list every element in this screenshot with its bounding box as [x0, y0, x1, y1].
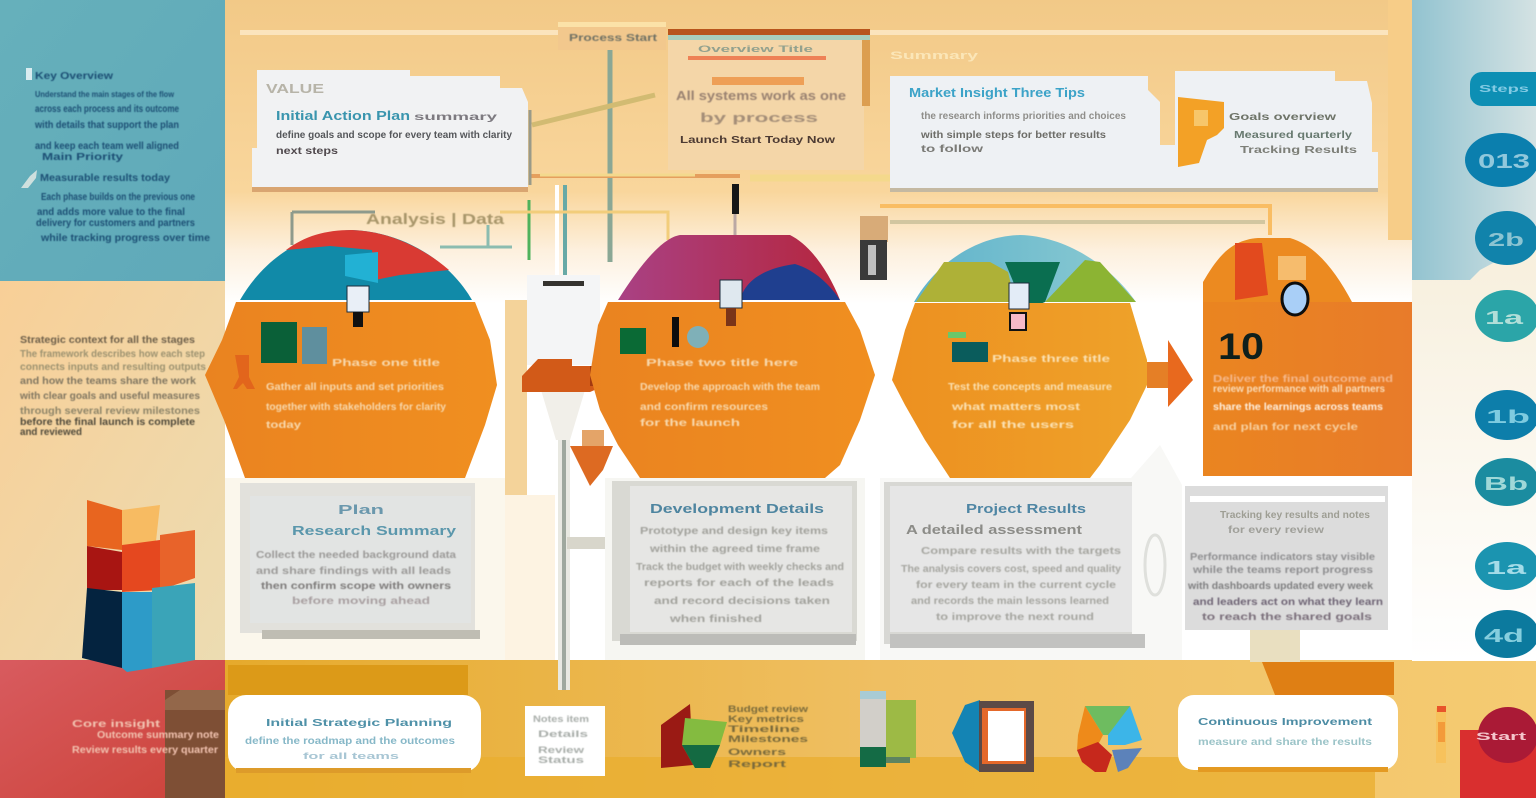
- badge 5: Bb: [1484, 474, 1528, 494]
- panel: right column: [1412, 0, 1536, 661]
- card 1: Plan: [338, 502, 384, 517]
- stage 1: [205, 230, 497, 478]
- card 4: while the teams report progress: [1192, 565, 1374, 576]
- document note: Details: [538, 729, 588, 739]
- card 3: The analysis covers cost, speed and quality: [901, 564, 1121, 575]
- panel: left middle beige: and how the teams share the work: [20, 376, 196, 387]
- hexagon 3: [892, 303, 1147, 478]
- icon: pin 4: [1282, 283, 1308, 315]
- pill 1: for all teams: [303, 751, 399, 761]
- dome 4: [1203, 238, 1352, 302]
- badge 1: [1465, 133, 1536, 187]
- icon: binder: [860, 691, 916, 767]
- panel: top left teal: Key Overview: [35, 71, 113, 82]
- center top callout: Launch Start Today Now: [680, 135, 835, 146]
- text 2: and confirm resources: [640, 402, 769, 413]
- badge 1: 013: [1478, 151, 1530, 173]
- pill 1: [228, 695, 481, 773]
- center top callout: by process: [700, 110, 818, 125]
- badge column: [1465, 133, 1536, 658]
- icon: pin 1: [347, 286, 369, 327]
- card 1: before moving ahead: [292, 596, 430, 607]
- card 4: to reach the shared goals: [1202, 612, 1373, 623]
- pill 2: measure and share the results: [1198, 737, 1373, 748]
- text 3: Test the concepts and measure: [948, 382, 1112, 393]
- icon: black bar and dial: [672, 317, 709, 348]
- dome 1: [240, 230, 472, 300]
- panel: top left teal: Understand the main stages of the flow: [35, 90, 175, 99]
- card 1: and share findings with all leads: [256, 566, 452, 577]
- card 1: then confirm scope with owners: [261, 581, 452, 592]
- card 2: within the agreed time frame: [649, 544, 821, 555]
- white header card right: with simple steps for better results: [920, 130, 1106, 141]
- card 1: Collect the needed background data: [256, 550, 456, 561]
- card 3: A detailed assessment: [906, 522, 1083, 537]
- text 4: share the learnings across teams: [1213, 402, 1383, 413]
- icon: orange pennant: [1178, 97, 1224, 167]
- legend lines: Timeline: [728, 724, 800, 734]
- text 1: Phase one title: [332, 358, 441, 369]
- document note: [525, 706, 605, 776]
- icon: lamp: [860, 216, 888, 280]
- text 4: review performance with all partners: [1213, 384, 1385, 395]
- badge 4: 1b: [1486, 407, 1530, 427]
- panel: top left teal: [0, 0, 225, 281]
- panel: top left teal: with details that support the plan: [34, 120, 179, 131]
- card 3: for every team in the current cycle: [916, 580, 1117, 591]
- panel: left middle beige: before the final launch is complete: [20, 417, 195, 428]
- white header card left: define goals and scope for every team with clarity: [276, 130, 512, 141]
- document note: Status: [538, 755, 584, 765]
- badge 5: [1475, 458, 1536, 506]
- text 2: Develop the approach with the team: [640, 382, 820, 393]
- arrow: down orange: [570, 430, 613, 486]
- badge 3: 1a: [1485, 308, 1525, 328]
- text 3: Phase three title: [992, 354, 1111, 365]
- card 4: Performance indicators stay visible: [1190, 552, 1375, 563]
- panel: top left teal: Measurable results today: [40, 173, 170, 184]
- panel: left middle beige: with clear goals and useful measures: [19, 391, 200, 402]
- panel: left middle beige: [0, 281, 225, 660]
- mid heading over connectors: Analysis | Data: [366, 211, 505, 228]
- icon: red book with green funnel: [661, 704, 727, 768]
- icon: isometric stacked box: [82, 500, 195, 672]
- text 4: and plan for next cycle: [1213, 422, 1359, 433]
- text 3: [948, 354, 1112, 431]
- white header card right: [890, 71, 1378, 192]
- exclamation mark: [1436, 706, 1446, 763]
- card 1: [225, 478, 505, 660]
- text 4: Deliver the final outcome and: [1213, 374, 1393, 385]
- white header card left: VALUE: [266, 81, 324, 96]
- badge: red corner: [1460, 707, 1536, 798]
- pill 2: Continuous Improvement: [1198, 717, 1373, 728]
- stage 2: [590, 184, 875, 478]
- dome 2: [618, 235, 840, 300]
- small note top right: Summary: [890, 50, 980, 62]
- pill 1: Initial Strategic Planning: [266, 718, 452, 729]
- card 4: with dashboards updated every week: [1187, 581, 1373, 592]
- white header card left: Initial Action Plan: [276, 108, 410, 123]
- icon: pin 2: [720, 280, 742, 326]
- card 4: for every review: [1228, 525, 1324, 536]
- text 1: Gather all inputs and set priorities: [266, 382, 444, 393]
- icon: green box: [261, 322, 297, 363]
- white header card right: the research informs priorities and choices: [921, 111, 1126, 122]
- panel: top left teal: Main Priority: [42, 152, 124, 163]
- page background: [225, 0, 1412, 660]
- pill 1: define the roadmap and the outcomes: [245, 736, 455, 747]
- right nav pill: Steps: [1479, 84, 1530, 95]
- icon: teal tile: [948, 332, 988, 362]
- white header card left: [252, 70, 528, 192]
- card 2: Track the budget with weekly checks and: [636, 562, 844, 573]
- text 3: what matters most: [951, 402, 1081, 413]
- right nav pill: [1470, 72, 1536, 106]
- arrow: right orange: [1147, 340, 1193, 407]
- card 2: when finished: [669, 614, 762, 625]
- card 2: [605, 478, 865, 660]
- card 3: Compare results with the targets: [921, 546, 1122, 557]
- badge 6: 1a: [1486, 558, 1528, 578]
- hexagon 1: [205, 302, 497, 478]
- tab label top center: [558, 22, 666, 50]
- icon: grey gear: [302, 327, 327, 364]
- icon: pole: [732, 184, 739, 214]
- badge 7: [1475, 610, 1536, 658]
- legend lines: Milestones: [728, 734, 808, 744]
- card 3: [880, 445, 1182, 660]
- icon: orange bowl: [522, 359, 604, 392]
- text 1: [266, 358, 446, 431]
- icon: figure: [233, 355, 255, 389]
- badge 3: [1475, 290, 1536, 342]
- stage 4: [1203, 238, 1412, 476]
- dome 3: [914, 235, 1136, 310]
- white header card right: Measured quarterly: [1234, 130, 1353, 141]
- panel: left middle beige: connects inputs and resulting outputs: [20, 362, 206, 373]
- badge 4: [1475, 390, 1536, 440]
- card 2: reports for each of the leads: [644, 578, 835, 589]
- panel: top left teal: and keep each team well aligned: [35, 141, 179, 152]
- white header card right: Market Insight Three Tips: [909, 85, 1085, 100]
- white header card left: next steps: [276, 146, 339, 157]
- stage 3: [860, 216, 1147, 478]
- panel: bottom left red: Review results every quarter: [72, 745, 218, 756]
- card 4: Tracking key results and notes: [1220, 510, 1370, 521]
- white header card right: Tracking Results: [1240, 145, 1358, 156]
- legend lines: Report: [728, 759, 786, 769]
- panel: top left teal: delivery for customers and partners: [36, 218, 195, 229]
- text 3: for all the users: [952, 420, 1075, 431]
- text 2: Phase two title here: [646, 358, 799, 369]
- panel: top left teal: while tracking progress over time: [40, 233, 210, 244]
- panel: left middle beige: through several review milestones: [20, 406, 200, 417]
- white vertical column and funnel: [505, 275, 607, 690]
- panel: top left teal: Each phase builds on the previous one: [41, 192, 195, 203]
- card 3: Project Results: [966, 501, 1086, 516]
- text 4: [1213, 374, 1393, 433]
- card 2: Prototype and design key items: [640, 526, 829, 537]
- icon: green tile: [620, 328, 646, 354]
- legend lines: Budget review: [728, 704, 809, 714]
- legend lines: [728, 704, 809, 769]
- text 2: for the launch: [640, 418, 740, 429]
- white header card right: Goals overview: [1229, 112, 1336, 123]
- connector lines: [292, 48, 1270, 275]
- panel: left middle beige: Strategic context for all the stages: [20, 335, 195, 346]
- icon: framed document: [952, 700, 1034, 772]
- badge 2: 2b: [1488, 230, 1524, 250]
- panel: bottom left red: Core insight: [72, 719, 161, 730]
- panel: bottom left red: Outcome summary note: [97, 730, 219, 741]
- panel: top left teal: and adds more value to the final: [37, 207, 185, 218]
- icon: pin 3: [1009, 283, 1029, 330]
- badge 2: [1475, 211, 1536, 265]
- icon: faceted gem: [1077, 706, 1142, 772]
- badge 7: 4d: [1484, 626, 1524, 646]
- panel: left middle beige: The framework describes how each step: [20, 349, 205, 360]
- rectangle 4: [1203, 302, 1412, 476]
- panel: bottom left red: [0, 660, 225, 798]
- badge 6: [1475, 542, 1536, 590]
- panel: left middle beige: and reviewed: [20, 427, 82, 438]
- center top callout: [668, 29, 870, 170]
- legend lines: Key metrics: [728, 714, 804, 724]
- badge: red corner: Start: [1476, 731, 1527, 743]
- panel: bottom band: [225, 660, 1536, 798]
- text 1: today: [266, 420, 302, 431]
- center top callout: All systems work as one: [676, 88, 846, 103]
- card 4: and leaders act on what they learn: [1193, 597, 1383, 608]
- document note: Review: [538, 745, 585, 755]
- pill 2: [1178, 695, 1398, 772]
- panel: top left teal: across each process and its outcome: [35, 104, 179, 115]
- center top callout: Overview Title: [698, 44, 813, 54]
- white header card left: summary: [414, 112, 498, 123]
- text 2: [640, 358, 820, 429]
- card 2: Development Details: [650, 501, 824, 516]
- card 3: and records the main lessons learned: [911, 596, 1109, 607]
- legend lines: Owners: [728, 747, 786, 757]
- text 1: together with stakeholders for clarity: [266, 402, 446, 413]
- document note: Notes item: [533, 714, 589, 724]
- tab label top center: Process Start: [569, 33, 658, 44]
- white header card right: to follow: [921, 144, 983, 155]
- number 10: 10: [1218, 326, 1264, 367]
- card 3: to improve the next round: [936, 612, 1094, 623]
- top rule lines: [240, 30, 1388, 35]
- card 4: [1185, 486, 1388, 662]
- card 1: Research Summary: [292, 523, 457, 538]
- card 2: and record decisions taken: [654, 596, 830, 607]
- hexagon 2: [590, 302, 875, 478]
